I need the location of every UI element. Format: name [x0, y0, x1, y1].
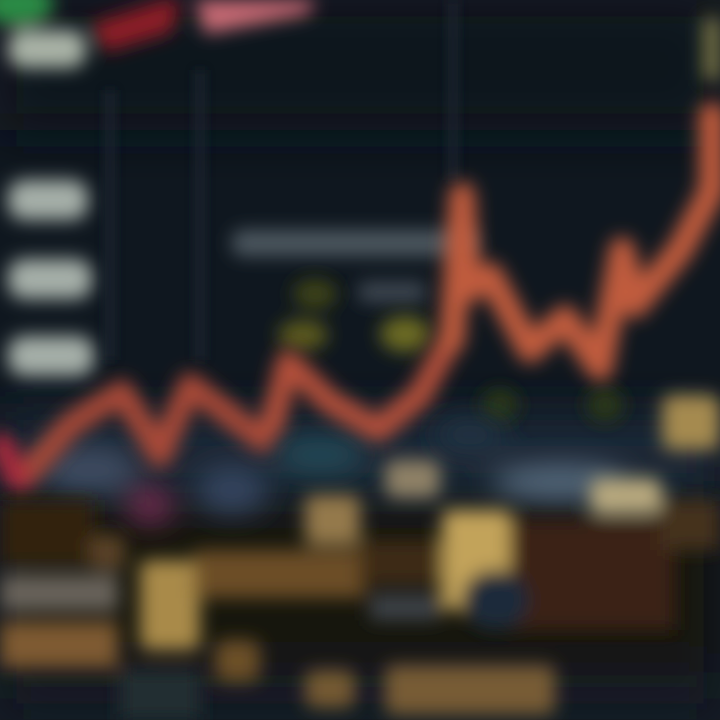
gold bars — [0, 395, 720, 720]
left axis labels — [8, 180, 94, 376]
centre chart label — [232, 230, 476, 302]
olive markers — [278, 279, 623, 421]
candles below the price line — [42, 419, 628, 525]
top legend blobs — [0, 0, 316, 68]
top-right accent — [704, 18, 720, 80]
vertical faint gridlines — [110, 0, 453, 360]
orange-red price line — [2, 115, 712, 480]
